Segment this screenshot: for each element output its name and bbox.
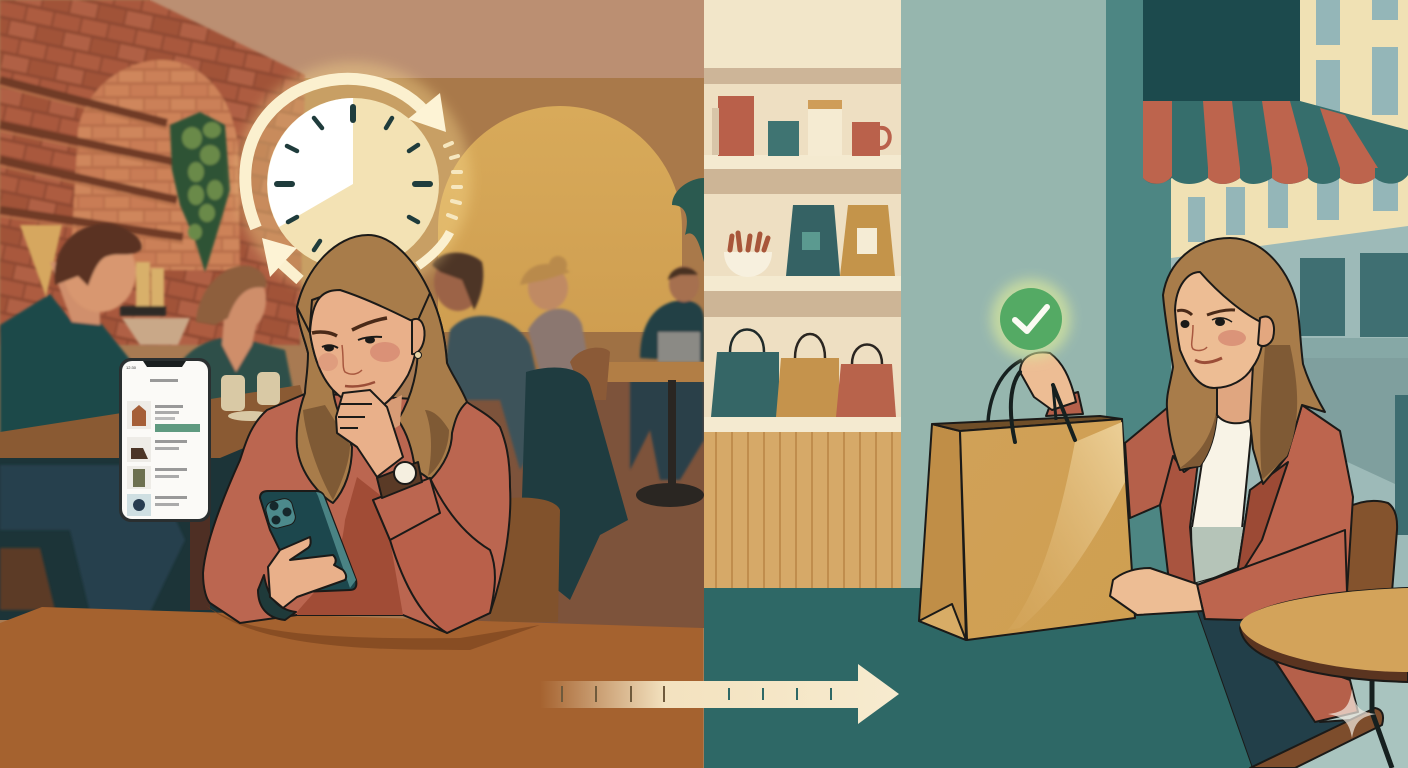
- hair left strand: [297, 307, 352, 503]
- raised hand: [1020, 352, 1076, 410]
- shirt: [1192, 417, 1252, 583]
- neck: [1217, 365, 1253, 423]
- wall arch: [438, 106, 682, 340]
- panel: teal wall and street: [901, 0, 1408, 600]
- sweater shadow: [297, 477, 403, 615]
- dark sign: [1143, 0, 1300, 101]
- icon: plant at arch edge: [672, 178, 704, 262]
- thinking hand: [336, 390, 403, 477]
- foreground table: right: [704, 588, 1252, 768]
- panel: brick wall: [0, 0, 305, 345]
- ear: [1258, 316, 1274, 346]
- chair back right: [1340, 501, 1397, 592]
- bag highlight: [1008, 422, 1125, 630]
- bag back handle: [988, 360, 1022, 422]
- under-table dark area: [0, 440, 290, 620]
- hair right strand: [398, 293, 467, 480]
- person: man at left table: [0, 224, 185, 612]
- person: man with dark jacket: [432, 253, 548, 470]
- bag front handles: [1011, 372, 1020, 442]
- icon: sparkle watermark: [1328, 689, 1376, 738]
- wristband: [258, 575, 296, 620]
- watch: [377, 462, 422, 498]
- pants and lower jacket: [1195, 606, 1358, 768]
- bowl: [724, 252, 772, 277]
- ear: [412, 319, 424, 354]
- person: woman at left table: [170, 266, 295, 405]
- shelf items: [711, 96, 896, 417]
- hair shadows: [303, 405, 350, 500]
- panel: shop shelves: [704, 0, 901, 590]
- wood panel: [704, 432, 901, 588]
- awning: [1143, 101, 1408, 184]
- eyes and brows: [1177, 310, 1235, 328]
- face: [310, 290, 418, 410]
- hand on phone: [268, 537, 346, 608]
- phone screen callout: [119, 358, 211, 522]
- jacket cuff and forearm: [1197, 530, 1347, 620]
- coffee bags: [786, 205, 840, 276]
- cycle arrow bottom: [280, 262, 300, 280]
- eyes and brows: [312, 318, 387, 352]
- clock: cycling time icon: [235, 62, 471, 298]
- person: woman with bag: [1125, 238, 1353, 620]
- building windows: [1188, 0, 1398, 242]
- jacket torso right: [1197, 405, 1353, 620]
- left cafe table: [0, 372, 310, 610]
- cycle arrow top: [245, 79, 425, 228]
- phone status text: 12:30: [126, 365, 137, 370]
- wall pennant and books: [20, 225, 190, 345]
- person: woman looking at phone: [203, 235, 510, 633]
- panel: cafe background: [0, 0, 704, 768]
- icon: green check badge: [991, 279, 1071, 359]
- cafe chair and coat: [490, 368, 628, 622]
- hair cap: [297, 235, 447, 363]
- round cafe table and chair: [1240, 588, 1408, 768]
- neck: [385, 395, 402, 430]
- sweater: [203, 393, 510, 633]
- person: man at far table: [630, 266, 704, 480]
- icon: hanging plant: [170, 112, 230, 272]
- shopping bag: [919, 352, 1203, 640]
- dotted progress arrow: [540, 664, 899, 724]
- far cafe table: [570, 348, 704, 507]
- clock face: [267, 98, 439, 270]
- phone: [260, 491, 356, 592]
- foreground table: left: [0, 605, 703, 768]
- background people: [0, 224, 704, 612]
- shopping bags on shelf: [711, 352, 779, 417]
- sleeve cuff and forearm: [373, 478, 495, 633]
- floor right of table: [1171, 588, 1408, 768]
- hair: [1163, 238, 1325, 484]
- person: woman in back: [520, 256, 590, 372]
- left sleeve: [1125, 408, 1175, 518]
- face: [1175, 272, 1263, 388]
- resting hand: [1110, 568, 1203, 615]
- raised hand sleeve: [1046, 392, 1083, 416]
- jacket torso left: [1160, 456, 1198, 590]
